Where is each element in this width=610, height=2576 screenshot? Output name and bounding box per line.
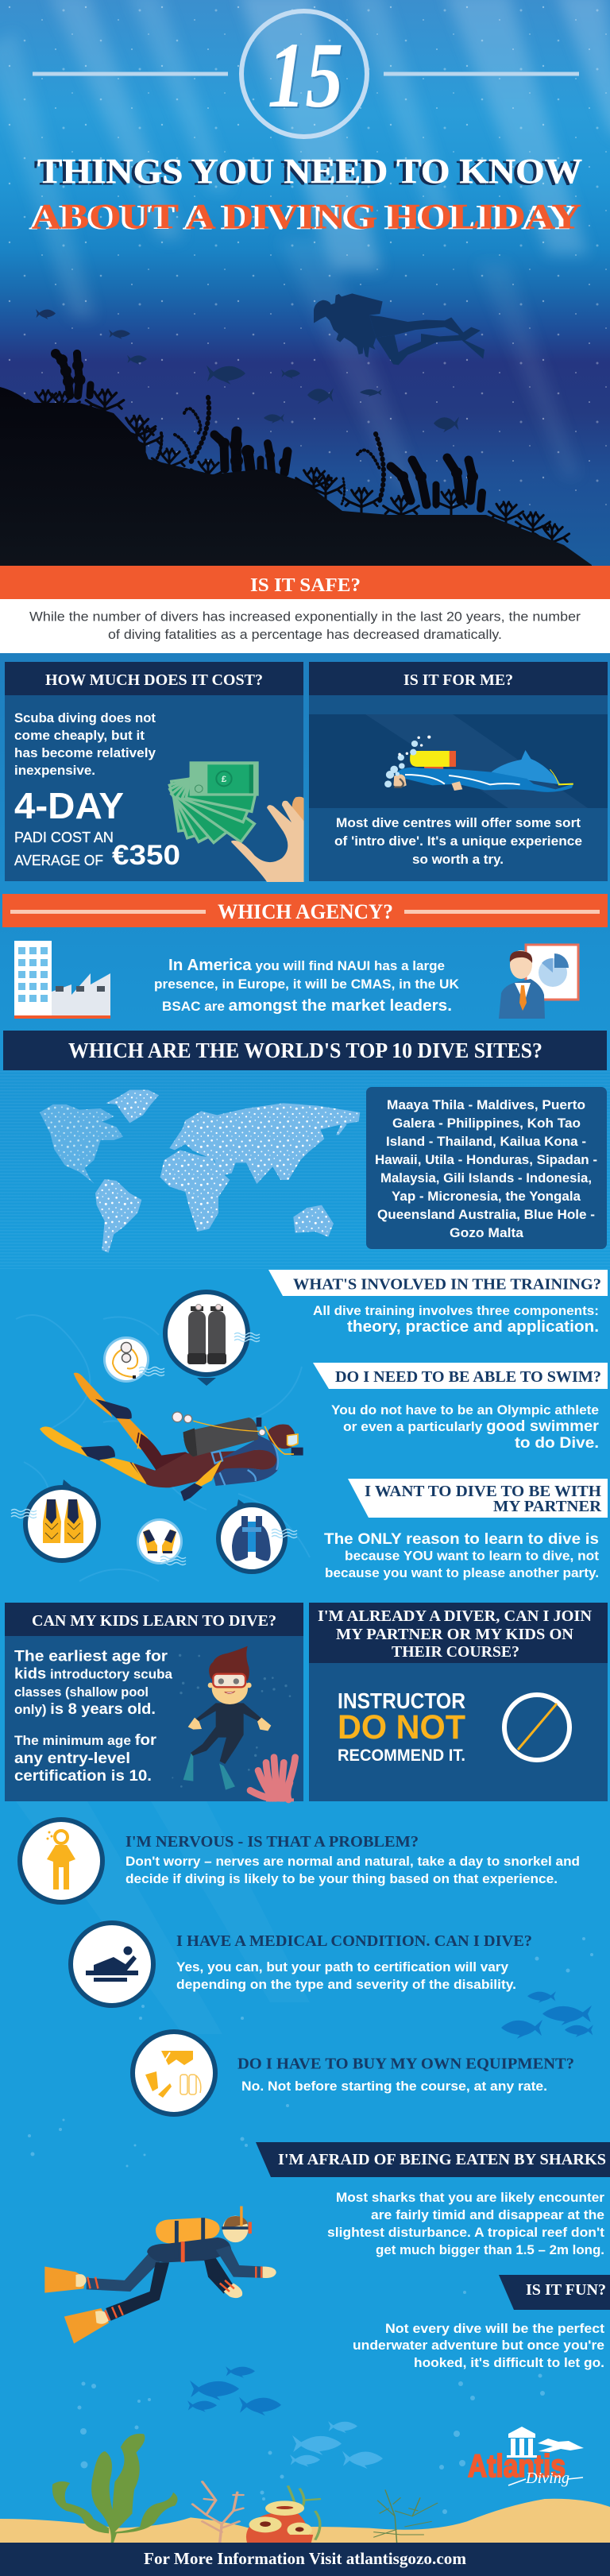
title: THINGS YOU NEED TO KNOW (34, 153, 579, 192)
kids text: certification is 10. (14, 1767, 152, 1785)
callout: training (268, 1270, 608, 1336)
panel: dive site list: Maaya Thila - Maldives, Puerto (387, 1097, 585, 1112)
section: is it safe: While the number of divers has increased exponentially in the last 20 years, the number (29, 609, 581, 625)
light rays (16, 1801, 310, 2034)
panel: kids (5, 1603, 303, 1801)
cost text: €350 (112, 840, 180, 871)
kids text: The earliest age for (14, 1648, 168, 1665)
illustration: kid diver and coral (172, 1646, 295, 1801)
kids text: The minimum age for (14, 1731, 156, 1749)
fish school: upper right (501, 1991, 593, 2039)
callout: partner: because you want to please another party. (325, 1566, 599, 1580)
medical item: Yes, you can, but your path to certification will vary (176, 1960, 509, 1975)
logo: Atlantis Diving: Atlantis (468, 2449, 566, 2484)
cost text: PADI COST AN (14, 830, 114, 845)
medical item: depending on the type and severity of the disability. (176, 1978, 516, 1992)
fish school: lower (187, 2366, 281, 2415)
title: ABOUT A DIVING HOLIDAY (29, 198, 577, 237)
cost text: has become relatively (14, 745, 156, 760)
section: training gear and diver (11, 1292, 303, 1572)
equipment item: No. Not before starting the course, at any rate. (241, 2079, 547, 2094)
callout: sharks: slightest disturbance. A tropical reef don't (327, 2226, 605, 2240)
callout: training: theory, practice and application. (347, 1318, 599, 1336)
icon: banknotes and hand (169, 761, 304, 882)
callout: is it fun: hooked, it's difficult to let go. (414, 2356, 604, 2370)
equipment item (133, 2032, 574, 2114)
recommendation text: INSTRUCTOR (338, 1688, 465, 1713)
intro text (334, 816, 582, 867)
branch coral (192, 2481, 243, 2543)
panel: dive site list (366, 1087, 607, 1249)
callout: training: WHAT'S INVOLVED IN THE TRAINING? (293, 1276, 601, 1294)
callout: swim: or even a particularly good swimmer (343, 1418, 600, 1435)
callout: swim: You do not have to be an Olympic athlete (331, 1403, 599, 1418)
heading: which agency (2, 894, 608, 927)
heading: top 10 dive sites (3, 1031, 607, 1070)
agency text: In America you will find NAUI has a large (168, 957, 445, 974)
icon: gloves (137, 1518, 186, 1565)
kids text: kids introductory scuba (14, 1665, 173, 1683)
panel: already a diver: I'M ALREADY A DIVER, CAN I JOIN (318, 1607, 593, 1625)
nervous item: decide if diving is likely to be your thing based on that experience. (125, 1872, 558, 1886)
icon: fins bubble (11, 1479, 98, 1561)
medical item (71, 1923, 532, 2005)
callout: sharks: get much bigger than 1.5 – 2m long. (376, 2243, 604, 2257)
green branch coral (373, 2489, 438, 2543)
icon: businessman with chart (499, 945, 578, 1019)
cost text (14, 710, 180, 871)
cost text: Scuba diving does not (14, 710, 156, 725)
kids text: only) is 8 years old. (14, 1700, 156, 1718)
map texture background (0, 1070, 610, 1269)
icon: banknotes and hand: £ (222, 775, 227, 784)
logo: Atlantis Diving (468, 2427, 584, 2487)
panel: is it for me: IS IT FOR ME? (403, 671, 513, 689)
callout: swim: to do Dive. (515, 1435, 599, 1452)
agency text (154, 957, 459, 1015)
callout: is it fun: underwater adventure but once you're (353, 2338, 604, 2353)
callout: sharks (256, 2142, 610, 2257)
kids text: any entry-level (14, 1750, 130, 1767)
number badge: 15 (269, 25, 345, 129)
section: is it safe (0, 566, 610, 653)
icon: prohibition sign (504, 1695, 569, 1760)
icon: gauge (103, 1336, 164, 1383)
panel: dive site list: Yap - Micronesia, the Yongala (392, 1189, 581, 1204)
fish school: faint (290, 2421, 383, 2469)
callout: partner: MY PARTNER (493, 1498, 602, 1515)
recommendation text: RECOMMEND IT. (338, 1746, 465, 1765)
recommendation text: DO NOT (338, 1708, 465, 1746)
panel: dive site list: Island - Thailand, Kailua Kona - (386, 1134, 586, 1149)
callout: partner: I WANT TO DIVE TO BE WITH (365, 1483, 601, 1500)
callout: training: All dive training involves three components: (313, 1304, 599, 1318)
icon: office and factory (14, 941, 110, 1019)
icon: buoyancy vest bubble (218, 1499, 297, 1572)
seaweed (52, 2434, 178, 2543)
agency text: presence, in Europe, it will be CMAS, in the UK (154, 977, 459, 992)
panel: dive site list: Queensland Australia, Blue Hole - (377, 1207, 595, 1222)
logo: Atlantis Diving: Diving (525, 2470, 569, 2487)
callout: is it fun (353, 2275, 610, 2370)
kids text (14, 1648, 173, 1785)
panel: already a diver: MY PARTNER OR MY KIDS ON (336, 1626, 574, 1643)
agency text: BSAC are amongst the market leaders. (162, 997, 452, 1015)
panel: dive site list: Hawaii, Utila - Honduras, Sipadan - (375, 1152, 597, 1167)
number badge (33, 11, 579, 137)
anemone coral (246, 2485, 321, 2543)
heading: top 10 dive sites: WHICH ARE THE WORLD'S TOP 10 DIVE SITES? (68, 1039, 542, 1062)
diver silhouette (314, 293, 485, 365)
panel: how much does it cost: HOW MUCH DOES IT COST? (45, 671, 263, 689)
panel: already a diver: THEIR COURSE? (392, 1643, 519, 1661)
callout: sharks: Most sharks that you are likely encounter (336, 2191, 605, 2205)
icon: patient on bed (71, 1923, 153, 2005)
cost text: 4-DAY (14, 785, 124, 826)
callout: is it fun: Not every dive will be the perfect (385, 2322, 605, 2336)
icon: small diver (384, 736, 573, 792)
footer: For More Information Visit atlantisgozo.com (144, 2549, 466, 2568)
icon: tanks bubble (165, 1292, 260, 1386)
panel: dive site list: Malaysia, Gili Islands - Indonesia, (380, 1170, 592, 1186)
panel: is it for me (309, 662, 608, 881)
panel: dive site list: Gozo Malta (450, 1225, 524, 1240)
nervous item: I'M NERVOUS - IS THAT A PROBLEM? (125, 1833, 419, 1851)
callout: partner: The ONLY reason to learn to dive is (324, 1531, 599, 1548)
icon: mask fins and tanks (133, 2032, 215, 2114)
nervous item: Don't worry – nerves are normal and natural, take a day to snorkel and (125, 1855, 580, 1869)
heading: which agency: WHICH AGENCY? (218, 900, 393, 923)
seabed illustration (0, 2434, 610, 2543)
callout: partner (324, 1479, 608, 1580)
icon: nervous diver (20, 1820, 102, 1902)
diver illustration (40, 1373, 303, 1501)
title: ABOUT A DIVING HOLIDAY (32, 197, 581, 236)
illustration: snorkel diver (44, 2207, 276, 2344)
middle background (0, 653, 610, 1271)
intro text: of 'intro dive'. It's a unique experience (334, 834, 582, 849)
panel: already a diver (309, 1603, 608, 1801)
kids text: classes (shallow pool (14, 1685, 149, 1700)
nervous item (20, 1820, 580, 1902)
medical item: I HAVE A MEDICAL CONDITION. CAN I DIVE? (176, 1932, 532, 1950)
panel: dive site list: Galera - Philippines, Koh Tao (392, 1116, 581, 1131)
footer (0, 2543, 610, 2576)
recommendation text (338, 1688, 465, 1765)
cost text: come cheaply, but it (14, 728, 145, 743)
callout: sharks: are fairly timid and disappear at the (371, 2208, 604, 2222)
world map (40, 1090, 360, 1253)
title: THINGS YOU NEED TO KNOW (37, 152, 582, 191)
intro text: so worth a try. (412, 853, 504, 867)
number badge: 15 (268, 23, 343, 127)
hero illustration (0, 0, 610, 566)
panel: how much does it cost (5, 662, 304, 882)
water caustics (16, 1315, 310, 1581)
section: is it safe: of diving fatalities as a percentage has decreased dramatically. (108, 627, 502, 642)
cost text: inexpensive. (14, 763, 95, 778)
callout: sharks: I'M AFRAID OF BEING EATEN BY SHARKS (278, 2151, 606, 2168)
title (29, 152, 582, 237)
callout: is it fun: IS IT FUN? (526, 2281, 606, 2299)
intro text: Most dive centres will offer some sort (336, 816, 581, 830)
equipment item: DO I HAVE TO BUY MY OWN EQUIPMENT? (237, 2055, 574, 2072)
reef silhouette (0, 349, 592, 566)
section: is it safe: IS IT SAFE? (250, 575, 361, 596)
callout: swim: DO I NEED TO BE ABLE TO SWIM? (335, 1368, 601, 1386)
callout: swim (313, 1363, 608, 1452)
cost text: AVERAGE OF (14, 853, 103, 868)
fish silhouettes (36, 309, 459, 432)
bubbles (28, 1937, 593, 2514)
panel: kids: CAN MY KIDS LEARN TO DIVE? (32, 1612, 276, 1630)
callout: partner: because YOU want to learn to dive, not (345, 1549, 600, 1564)
